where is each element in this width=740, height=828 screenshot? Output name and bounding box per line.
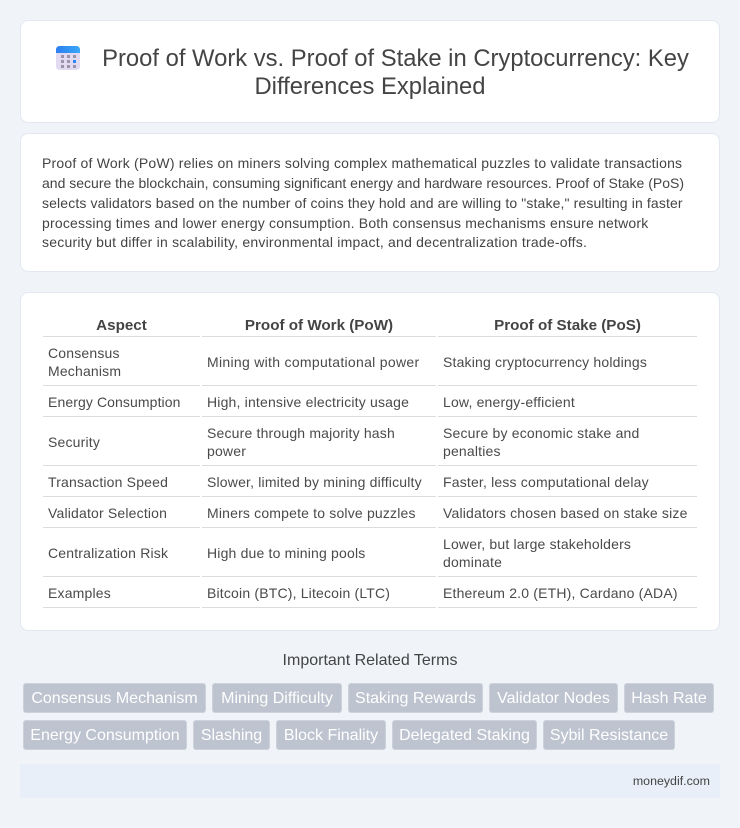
table header: Proof of Work (PoW) [245, 317, 393, 334]
intro text: and secure the blockchain, consuming significant energy and hardware resources. Proof of Stake (PoS) [42, 175, 684, 191]
tags: related terms [23, 683, 714, 750]
heading: related terms: Important Related Terms [283, 652, 457, 669]
row: consensus mechanism: Staking cryptocurrency holdings [443, 354, 647, 370]
row: validator selection [48, 505, 688, 521]
footer source: moneydif.com [633, 774, 710, 788]
intro text [42, 155, 684, 250]
row: centralization risk [48, 536, 631, 570]
table header: Proof of Stake (PoS) [494, 317, 641, 334]
row: transaction speed: Slower, limited by mining difficulty [207, 474, 422, 490]
row: transaction speed: Transaction Speed [48, 474, 168, 490]
tags: related terms: Staking Rewards [355, 690, 476, 707]
tags: related terms: Block Finality [284, 727, 378, 744]
row: security: Secure by economic stake and [443, 425, 639, 441]
panel: intro [20, 133, 720, 272]
intro text: security but differ in scalability, environmental impact, and decentralization trade-offs. [42, 234, 587, 250]
row: energy consumption: Energy Consumption [48, 394, 181, 410]
row: examples: Bitcoin (BTC), Litecoin (LTC) [207, 585, 390, 601]
intro text: Proof of Work (PoW) relies on miners solving complex mathematical puzzles to validate transactions [42, 155, 682, 171]
tags: related terms: Sybil Resistance [550, 727, 668, 744]
tags: related terms: Slashing [201, 727, 262, 744]
tags: related terms: Validator Nodes [497, 690, 610, 707]
footer [20, 764, 720, 798]
intro text: processing times and lower energy consumption. Both consensus mechanisms ensure network [42, 215, 648, 231]
intro text: selects validators based on the number of coins they hold and are willing to "stake," resulting in faster [42, 195, 683, 211]
row: validator selection: Validator Selection [48, 505, 167, 521]
row: consensus mechanism [48, 345, 647, 379]
table header: Aspect [96, 317, 147, 334]
table header [96, 317, 641, 334]
row: security: Secure through majority hash [207, 425, 395, 441]
row: examples: Ethereum 2.0 (ETH), Cardano (ADA) [443, 585, 678, 601]
icon: calendar [56, 46, 80, 70]
panel: title card [20, 20, 720, 123]
row: transaction speed [48, 474, 649, 490]
row: centralization risk: dominate [443, 554, 502, 570]
row: validator selection: Validators chosen based on stake size [443, 505, 688, 521]
row: energy consumption [48, 394, 575, 410]
tags: related terms: Hash Rate [631, 690, 707, 707]
row: examples [48, 585, 678, 601]
row: centralization risk: Centralization Risk [48, 545, 168, 561]
tags: related terms: Energy Consumption [30, 727, 180, 744]
row: security [48, 425, 639, 459]
row: energy consumption: High, intensive electricity usage [207, 394, 409, 410]
row: transaction speed: Faster, less computational delay [443, 474, 649, 490]
row: security: Security [48, 434, 100, 450]
row: consensus mechanism: Mining with computational power [207, 354, 419, 370]
row: security: power [207, 443, 246, 459]
row: centralization risk: Lower, but large stakeholders [443, 536, 631, 552]
tags: related terms: Mining Difficulty [221, 690, 333, 707]
row: consensus mechanism: Consensus [48, 345, 120, 361]
panel: comparison table [20, 292, 720, 631]
tags: related terms: Delegated Staking [399, 727, 530, 744]
row: centralization risk: High due to mining pools [207, 545, 365, 561]
title line 2: Differences Explained [254, 73, 486, 100]
row: energy consumption: Low, energy-efficient [443, 394, 575, 410]
row: consensus mechanism: Mechanism [48, 363, 121, 379]
row: security: penalties [443, 443, 501, 459]
row: examples: Examples [48, 585, 111, 601]
tags: related terms: Consensus Mechanism [31, 690, 198, 707]
row: validator selection: Miners compete to solve puzzles [207, 505, 416, 521]
title: Proof of Work vs. Proof of Stake in Cryptocurrency: Key [102, 45, 689, 72]
